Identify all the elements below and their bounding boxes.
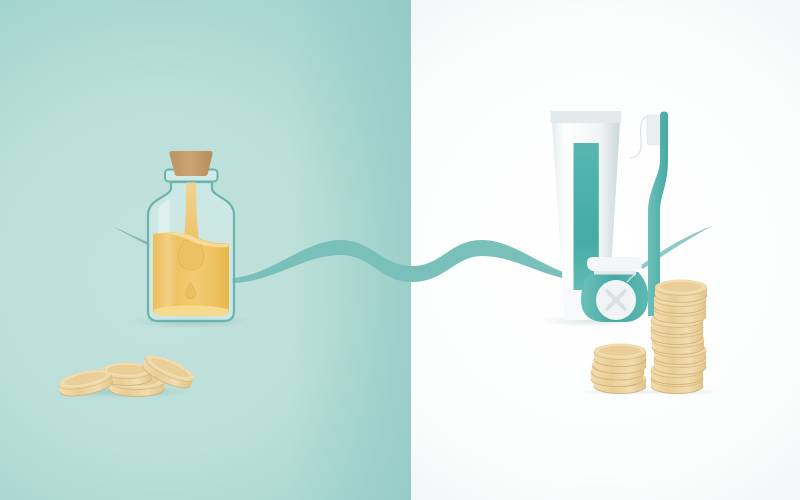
floss strand <box>627 274 636 282</box>
floss body <box>581 272 648 322</box>
tube body <box>552 122 620 288</box>
coin leaning right <box>140 351 197 393</box>
right wisp <box>640 226 712 269</box>
wave ribbon connecting both sides <box>232 240 566 283</box>
bristles <box>647 115 661 145</box>
coin leaning left <box>57 366 114 400</box>
handle <box>648 112 668 316</box>
small oil drop <box>186 283 196 299</box>
icon: left scattered coins <box>55 351 197 400</box>
bottle glass <box>148 182 234 321</box>
icon: short coin stack <box>578 344 662 395</box>
floss disc <box>596 280 636 320</box>
icon: dental floss box <box>581 257 648 322</box>
coin middle <box>102 362 152 386</box>
panel: left teal background <box>0 0 411 500</box>
cork <box>169 151 213 176</box>
liquid <box>153 232 229 315</box>
coin lying back <box>110 374 164 396</box>
icon: toothpaste tube <box>540 111 640 327</box>
glass highlight <box>158 199 170 234</box>
bottle shadow <box>129 314 253 328</box>
left wisp <box>112 226 150 246</box>
icon: toothbrush <box>630 112 668 316</box>
teal label <box>574 143 599 290</box>
large oil drop <box>178 240 204 270</box>
tube crimp <box>550 111 622 123</box>
floss lid <box>587 257 642 271</box>
panel: right white background <box>411 0 800 500</box>
oil stream <box>184 182 199 240</box>
cross mark <box>606 290 626 310</box>
floss thread <box>630 116 648 158</box>
liquid bottom highlight <box>154 305 228 316</box>
icon: oil bottle <box>129 151 253 328</box>
tube cap base <box>563 288 602 320</box>
liquid surface highlight <box>165 232 229 247</box>
bottle lip <box>165 170 218 182</box>
icon: tall coin stack <box>636 280 720 395</box>
